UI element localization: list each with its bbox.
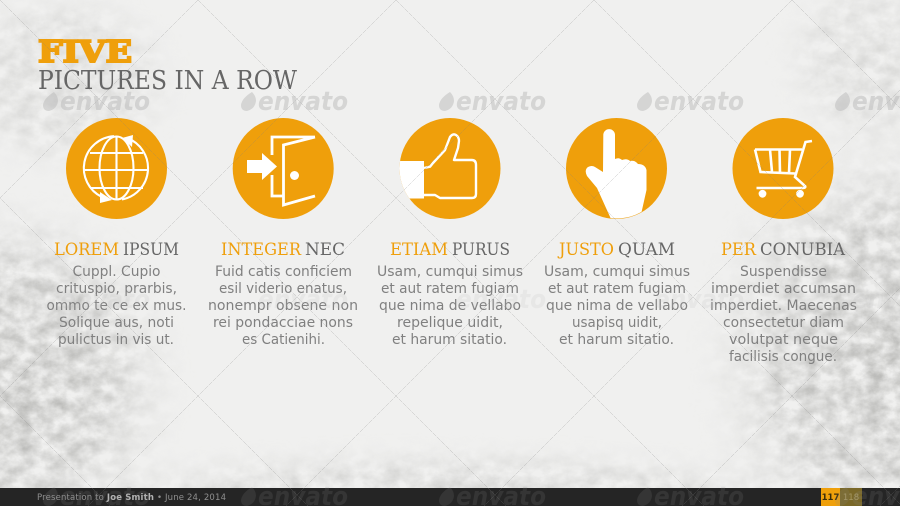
body: et aut ratem fugiam	[548, 281, 686, 297]
heading: NEC	[305, 240, 345, 260]
heading: PURUS	[452, 240, 510, 260]
body	[544, 264, 690, 348]
watermark: envato logos: envato	[654, 285, 744, 315]
body: nonempr obsene non	[208, 298, 358, 314]
footer bar	[0, 488, 900, 506]
watermark: envato logos: envato	[258, 285, 348, 315]
icon: door with arrow	[233, 118, 334, 219]
column 2 text	[208, 240, 358, 348]
title word: five: FIVE	[38, 35, 132, 70]
heading: QUAM	[618, 240, 675, 260]
body: esil viderio enatus,	[219, 281, 347, 297]
footer text: Presentation to Joe Smith • June 24, 2014	[37, 493, 226, 503]
body: Cuppl. Cupio	[72, 264, 160, 280]
watermark: envato logos: envato	[60, 87, 150, 117]
body: consectetur diam	[723, 315, 844, 331]
body	[710, 264, 857, 365]
icon: thumbs up	[398, 118, 500, 219]
body: que nima de vellabo	[546, 298, 688, 314]
body: et aut ratem fugiam	[381, 281, 519, 297]
body: Solique aus, noti	[59, 315, 174, 331]
icon: globe	[66, 118, 167, 219]
body: Fuid catis conficiem	[215, 264, 352, 280]
body: ommo te ce ex mus.	[46, 298, 186, 314]
page number: 117	[822, 493, 839, 503]
page number: 118	[843, 493, 859, 503]
icon: pointing hand	[566, 118, 667, 219]
heading: PER	[721, 240, 757, 260]
body: imperdiet accumsan	[711, 281, 856, 297]
icon: shopping cart	[732, 118, 834, 219]
body: repelique uidit,	[397, 315, 503, 331]
heading: IPSUM	[123, 240, 179, 260]
body: que nima de vellabo	[379, 298, 521, 314]
column 5 text	[710, 240, 857, 365]
body: es Catienihi.	[242, 332, 325, 348]
heading: CONUBIA	[760, 240, 846, 260]
body: usapisq uidit,	[572, 315, 662, 331]
body: crituspio, prarbis,	[56, 281, 177, 297]
body: volutpat neque	[729, 332, 838, 348]
watermark: envato logos: envato	[654, 87, 744, 117]
body: et harum sitatio.	[559, 332, 674, 348]
watermark: envato logos	[43, 87, 900, 506]
watermark: envato logos: envato	[456, 285, 546, 315]
column 1 text	[46, 240, 186, 348]
title	[38, 35, 297, 96]
heading: ETIAM	[390, 240, 448, 260]
body: pulictus in vis ut.	[58, 332, 174, 348]
body	[46, 264, 186, 348]
watermark: envato logos: envato	[456, 87, 546, 117]
body: Suspendisse	[740, 264, 827, 280]
heading: LOREM	[54, 240, 119, 260]
body: imperdiet. Maecenas	[710, 298, 857, 314]
page number	[821, 488, 862, 506]
heading: INTEGER	[221, 240, 302, 260]
body: rei pondacciae nons	[213, 315, 353, 331]
body: Usam, cumqui simus	[377, 264, 523, 280]
watermark: envato logos: envato	[258, 87, 348, 117]
body: et harum sitatio.	[392, 332, 507, 348]
body: Usam, cumqui simus	[544, 264, 690, 280]
column 4 text	[544, 240, 690, 348]
watermark: envato logos: envato	[60, 285, 150, 315]
column 3 text	[377, 240, 523, 348]
body	[208, 264, 358, 348]
body	[377, 264, 523, 348]
body: facilisis congue.	[729, 349, 837, 365]
heading: JUSTO	[557, 240, 614, 260]
subtitle: PICTURES IN A ROW	[38, 66, 297, 96]
